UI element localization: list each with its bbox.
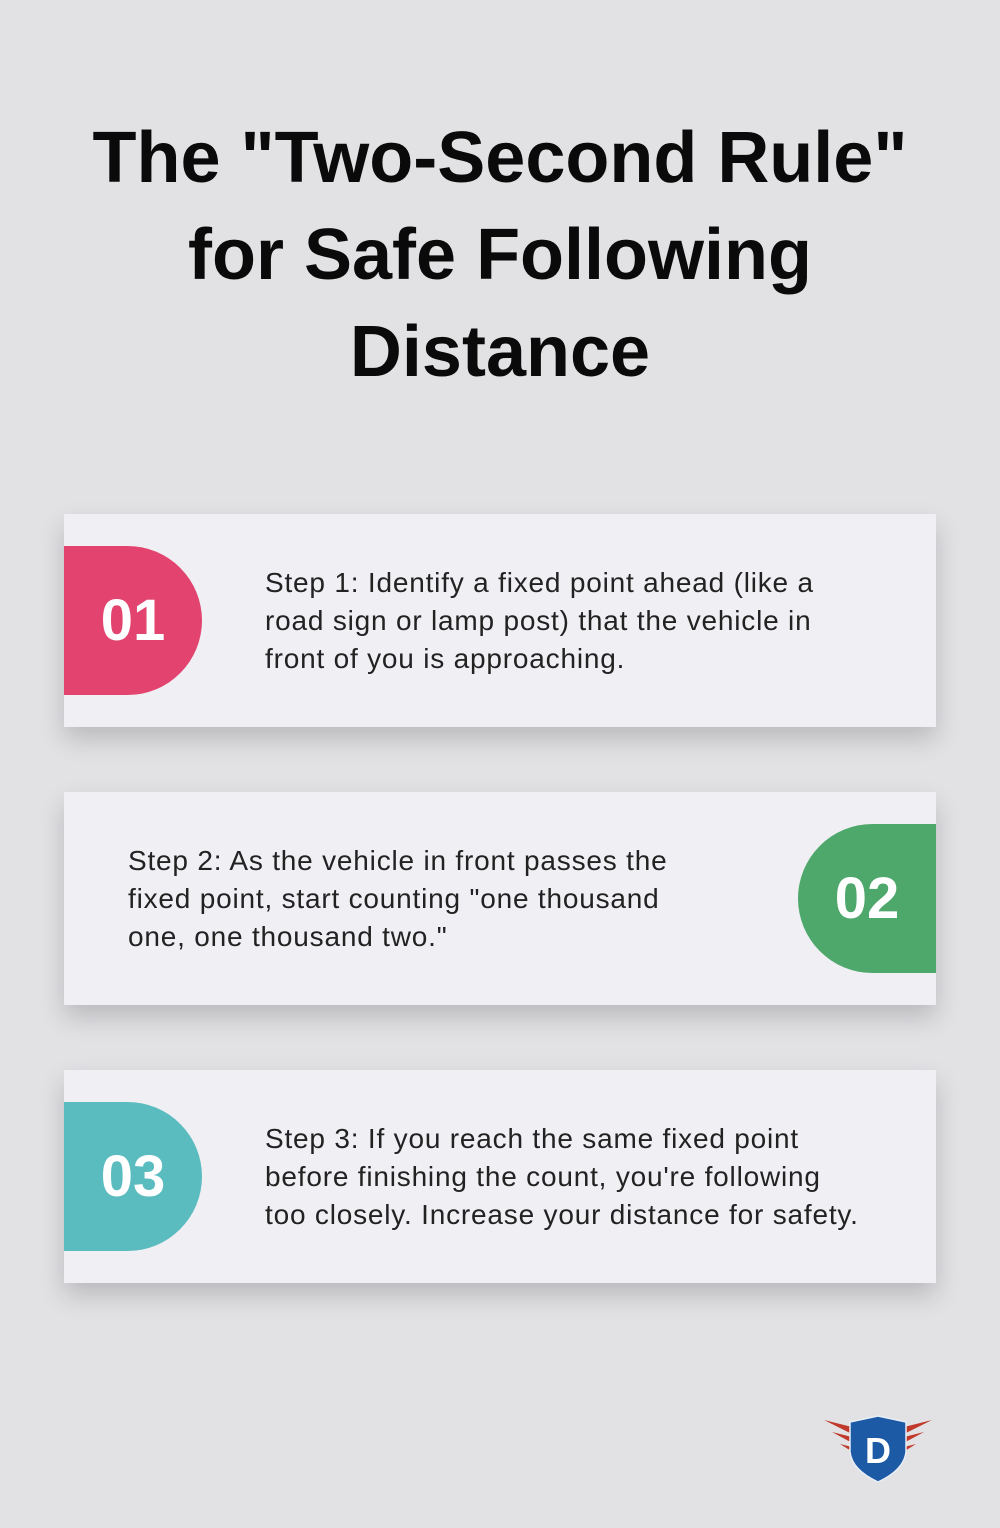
text step 3: before finishing the count, you're following (265, 1161, 821, 1192)
text step 2: one, one thousand two." (128, 921, 447, 952)
badge 02 (798, 824, 936, 973)
panel: step 1 (64, 514, 936, 727)
text step 2 (128, 845, 667, 952)
title: Distance (350, 312, 650, 392)
text step 1: Step 1: Identify a fixed point ahead (like a (265, 567, 814, 598)
icon: logo shield (824, 1416, 932, 1482)
panel: step 2 (64, 792, 936, 1005)
badge 01 (64, 546, 202, 695)
title (93, 118, 907, 392)
badge 01: 01 (101, 588, 165, 653)
text step 3 (265, 1123, 859, 1230)
text step 1: front of you is approaching. (265, 643, 625, 674)
badge 02: 02 (835, 866, 899, 931)
text step 3: too closely. Increase your distance for safety. (265, 1199, 859, 1230)
icon: logo shield: D (865, 1430, 891, 1471)
badge 03: 03 (101, 1144, 165, 1209)
title: The "Two-Second Rule" (93, 118, 907, 198)
panel: step 3 (64, 1070, 936, 1283)
text step 2: Step 2: As the vehicle in front passes the (128, 845, 667, 876)
text step 2: fixed point, start counting "one thousand (128, 883, 660, 914)
badge 03 (64, 1102, 202, 1251)
text step 1: road sign or lamp post) that the vehicle in (265, 605, 811, 636)
title: for Safe Following (188, 215, 812, 295)
text step 1 (265, 567, 814, 674)
text step 3: Step 3: If you reach the same fixed point (265, 1123, 799, 1154)
